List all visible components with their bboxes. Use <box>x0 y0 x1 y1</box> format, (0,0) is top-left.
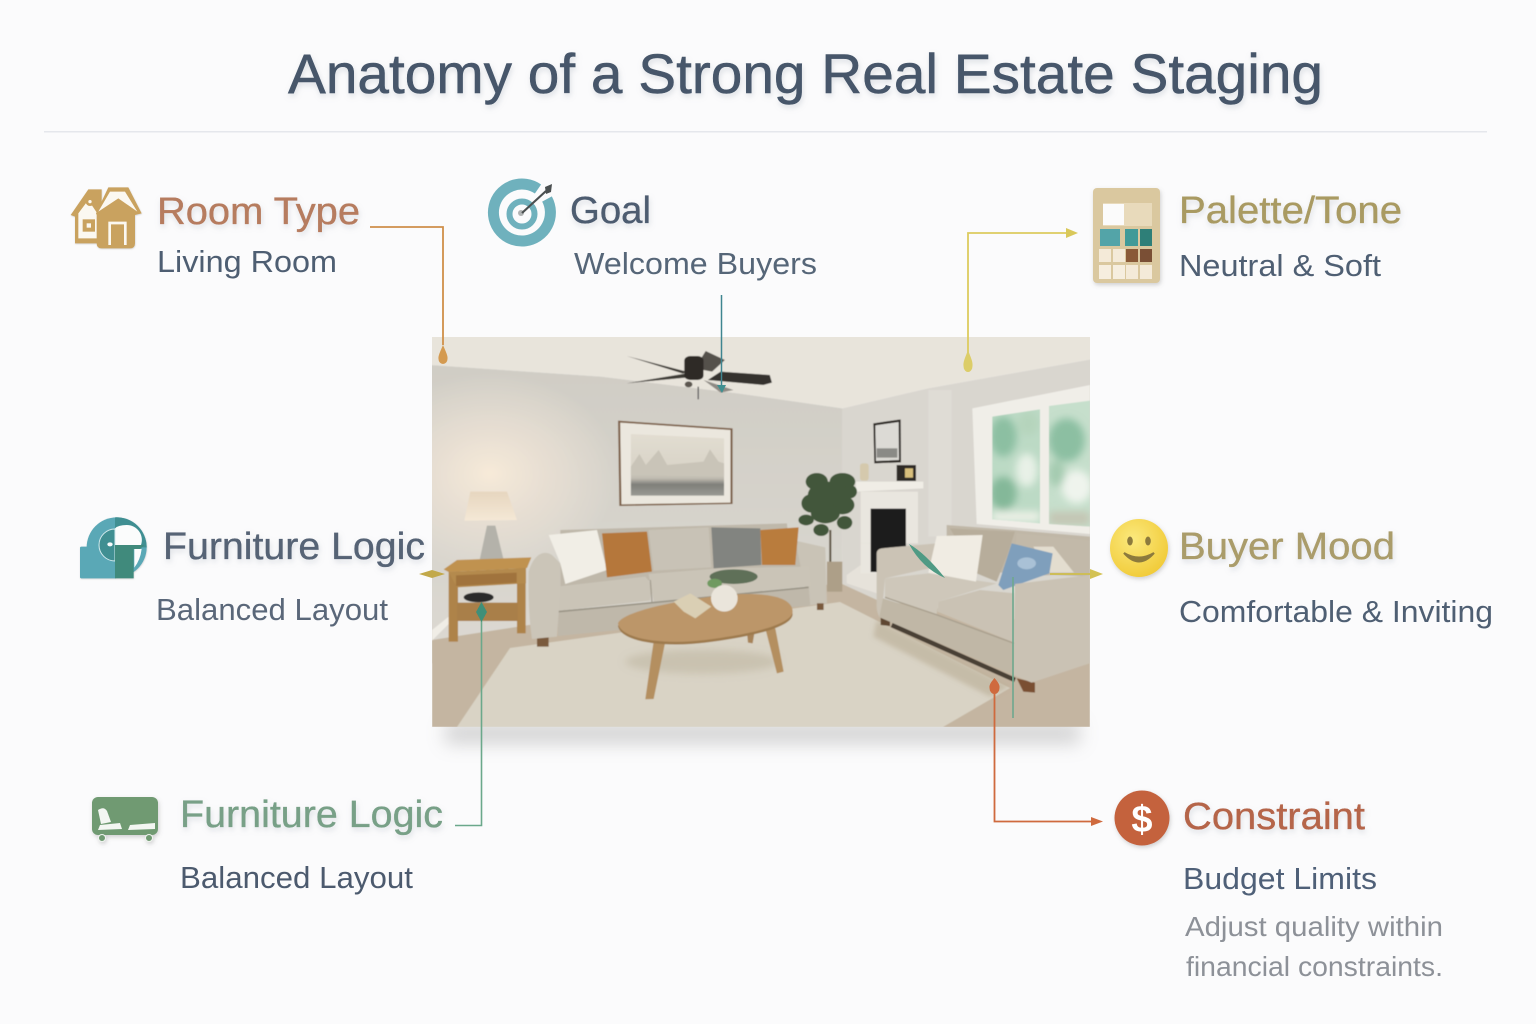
green line and leaf on right sofa <box>909 544 1013 718</box>
goal heading: Goal <box>570 190 651 232</box>
furniture logic heading upper: Furniture Logic <box>163 526 425 568</box>
constraint note: financial constraints. <box>1186 951 1443 982</box>
buyer mood heading: Buyer Mood <box>1179 526 1395 568</box>
buyer mood connector <box>1050 569 1103 579</box>
baseboard <box>432 617 449 641</box>
fireplace <box>847 419 923 593</box>
table lamp <box>464 492 517 564</box>
room type heading: Room Type <box>157 191 360 233</box>
left side of room <box>432 492 842 699</box>
icon: teal furniture emblem <box>80 517 147 578</box>
constraint note <box>1185 911 1443 982</box>
room shell <box>430 330 1097 663</box>
icon: house <box>71 187 142 248</box>
callout: room type <box>71 187 448 364</box>
left sofa <box>529 523 827 647</box>
photo shadow <box>445 722 1080 744</box>
icon: smiley <box>1110 519 1168 577</box>
rug <box>457 602 1010 727</box>
icon: dollar coin: $ <box>1131 799 1153 841</box>
goal connector <box>717 295 726 393</box>
callout: furniture logic lower <box>92 544 1013 895</box>
callout: furniture logic upper <box>80 517 445 627</box>
furniture logic value upper: Balanced Layout <box>156 592 388 627</box>
constraint value: Budget Limits <box>1183 861 1377 896</box>
staged living room photo <box>430 330 1097 727</box>
palette connector <box>963 228 1078 372</box>
constraint heading: Constraint <box>1183 796 1365 838</box>
corner column <box>928 390 952 537</box>
ceiling fan <box>627 351 772 399</box>
wood floor <box>432 583 1090 727</box>
furniture logic value lower: Balanced Layout <box>180 860 413 895</box>
plant foliage <box>798 473 857 536</box>
furniture logic heading lower: Furniture Logic <box>180 794 443 836</box>
title: Anatomy of a Strong Real Estate Staging <box>288 42 1323 105</box>
constraint note: Adjust quality within <box>1185 911 1443 942</box>
palette value: Neutral & Soft <box>1179 248 1381 283</box>
icon: palette swatches <box>1093 188 1160 283</box>
icon: sofa <box>92 797 158 842</box>
potted plant base <box>827 530 842 592</box>
furniture connector lower <box>455 602 487 826</box>
right side of room <box>847 385 1092 697</box>
side table <box>444 557 531 642</box>
room type value: Living Room <box>157 244 337 279</box>
coffee table and decor <box>618 569 793 699</box>
constraint connector <box>989 678 1103 826</box>
icon: target <box>493 184 552 241</box>
callout: goal <box>493 184 817 393</box>
room type connector <box>370 227 448 364</box>
goal value: Welcome Buyers <box>574 246 817 281</box>
buyer mood value: Comfortable & Inviting <box>1179 594 1493 629</box>
window <box>972 385 1092 534</box>
wall art <box>618 421 733 506</box>
callout: constraint <box>989 678 1443 982</box>
icon: dollar coin <box>1114 790 1170 846</box>
callout: buyer mood <box>1050 519 1493 629</box>
rug shadow under right sofa <box>873 620 1010 697</box>
furniture connector upper <box>419 570 445 578</box>
right sofa <box>877 525 1090 693</box>
palette heading: Palette/Tone <box>1179 190 1402 232</box>
callout: palette and tone <box>963 188 1402 372</box>
